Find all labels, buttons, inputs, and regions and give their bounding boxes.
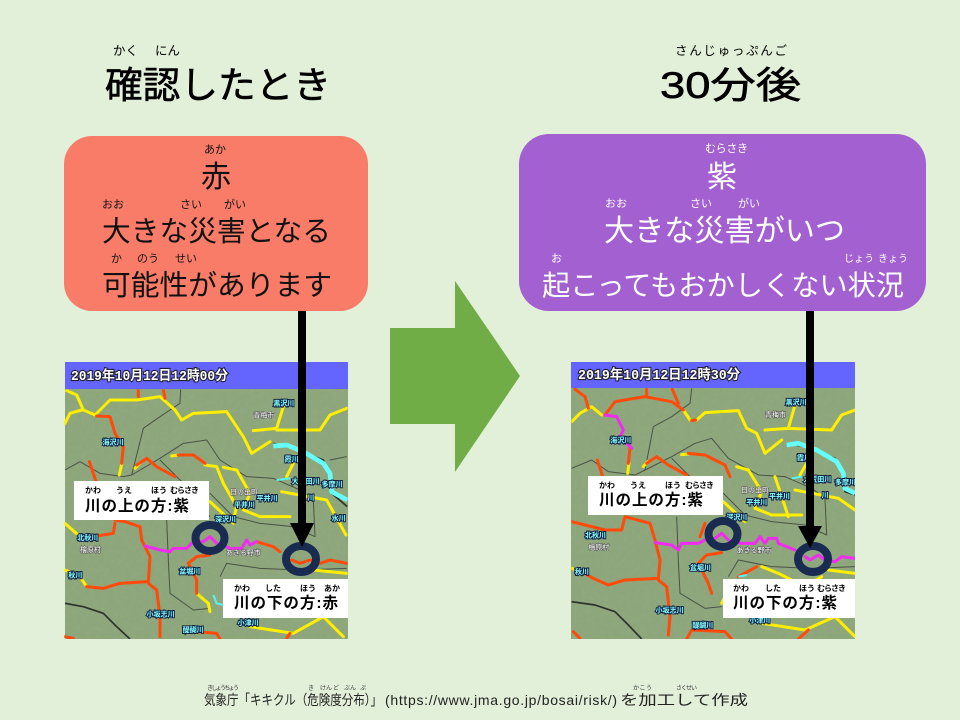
label: upstream right: うえ	[630, 480, 646, 490]
map: 12:30: 海沢川	[610, 436, 631, 445]
panel: purple warning: じょう	[844, 253, 874, 265]
label: upstream left: ほう	[151, 486, 167, 495]
map: 12:00: 日の出町	[230, 487, 258, 496]
map: 12:00: 霞川	[285, 455, 299, 463]
map: 12:30: 深沢川	[726, 512, 747, 521]
label: downstream right: した	[765, 583, 781, 593]
label: downstream right: ほう	[799, 584, 815, 593]
map: 12:30: 平井川	[746, 498, 767, 507]
source credit: き	[308, 685, 314, 692]
map: 12:00: 多摩川	[322, 480, 343, 489]
map: 12:30: 檜原村	[588, 542, 609, 551]
map: 12:30: 盆堀川	[690, 563, 711, 572]
label: downstream left: 川の下の方:赤	[234, 593, 338, 612]
label: downstream left	[223, 579, 348, 618]
label: upstream right: むらさき	[685, 481, 714, 490]
map: 12:30: 小坂志川	[656, 606, 684, 615]
map: 12:00	[65, 362, 348, 639]
panel: red warning	[64, 136, 368, 311]
map: 12:30: 醍醐川	[692, 621, 713, 630]
panel: purple warning: がい	[738, 196, 760, 210]
map: 12:00: 大荒田川	[292, 476, 320, 485]
panel: red warning: せい	[175, 252, 197, 265]
map: 12:00: 北秋川	[77, 533, 98, 542]
marker: downstream right	[798, 546, 828, 572]
label: upstream left: 川の上の方:紫	[85, 496, 189, 515]
arrow: red panel to river	[290, 311, 314, 547]
panel: red warning: がい	[224, 197, 246, 211]
map: 12:30: 青梅市	[765, 410, 786, 419]
map: 12:30: 川	[822, 491, 829, 499]
source credit: きしょうちょう	[207, 685, 239, 692]
panel: red warning: のう	[137, 252, 159, 265]
map: 12:00: 青梅市	[253, 411, 274, 420]
source credit: けん	[320, 685, 332, 692]
label: upstream right: ほう	[665, 481, 681, 490]
panel: purple warning: おお	[605, 197, 627, 210]
map: 12:00: 川	[307, 494, 314, 502]
map: 12:00: 水川	[332, 513, 346, 522]
source credit: 気象庁「キキクル（危険度分布）」	[204, 692, 382, 708]
label: upstream left	[74, 481, 209, 520]
label: upstream right: かわ	[599, 481, 615, 490]
map: 12:00: 小坂志川	[147, 610, 175, 619]
map: 12:00: 平井川	[234, 500, 255, 509]
label: upstream left: うえ	[116, 485, 132, 495]
map: 12:30	[571, 362, 856, 639]
marker: upstream left	[196, 525, 224, 551]
source credit: ぷ	[360, 685, 366, 692]
source credit: ぶん	[344, 685, 356, 692]
label: downstream left: した	[265, 583, 281, 593]
heading: left: 確認したとき	[105, 65, 331, 106]
map: 12:00: 2019年10月12日12時00分	[71, 367, 228, 385]
panel: red warning: 可能性があります	[102, 270, 332, 302]
source credit: ど	[333, 684, 339, 692]
arrow: purple panel to river	[798, 311, 822, 548]
marker: upstream right	[708, 521, 738, 547]
panel: purple warning	[519, 134, 926, 311]
map: 12:30: 大荒田川	[803, 475, 831, 484]
panel: red warning: 大きな災害となる	[102, 216, 331, 248]
map: 12:30: 2019年10月12日12時30分	[578, 366, 740, 384]
heading: left: にん	[155, 44, 180, 58]
label: downstream right: かわ	[733, 584, 749, 593]
arrow: green transition	[390, 281, 520, 472]
source credit	[204, 684, 748, 708]
map: 12:30: 霞川	[797, 454, 811, 462]
label: upstream left: むらさき	[170, 486, 199, 495]
panel: purple warning: さい	[690, 197, 712, 210]
panel: red warning: か	[111, 252, 122, 265]
map: 12:30: 黒沢川	[786, 398, 807, 407]
map: 12:30: 秋川	[575, 567, 589, 576]
map: 12:00: 海沢川	[103, 437, 124, 446]
panel: red warning: 赤	[201, 161, 231, 194]
map: 12:00: 小津川	[238, 618, 259, 627]
heading: right	[660, 43, 801, 106]
source credit: かこう	[633, 685, 652, 692]
label: upstream right	[588, 476, 723, 515]
map: 12:00: あきる野市	[226, 548, 261, 557]
map: 12:00: 盆堀川	[179, 566, 200, 575]
panel: purple warning: お	[551, 252, 562, 265]
heading: left: かく	[113, 44, 138, 58]
map: 12:00: 醍醐川	[183, 625, 204, 634]
source credit: (https://www.jma.go.jp/bosai/risk/)	[385, 692, 617, 708]
marker: downstream left	[286, 546, 316, 572]
map: 12:00: 檜原村	[80, 545, 101, 554]
map: 12:30: 平井川	[769, 491, 790, 500]
label: upstream right: 川の上の方:紫	[599, 490, 703, 509]
map: 12:00: 黒沢川	[273, 398, 294, 407]
label: downstream right	[723, 579, 855, 618]
panel: purple warning: むらさき	[705, 142, 748, 155]
panel: purple warning: 起こってもおかしくない状況	[542, 270, 904, 301]
heading: right: さんじゅっぷんご	[675, 43, 787, 58]
label: downstream right: むらさき	[817, 584, 846, 593]
map: 12:30: 多摩川	[835, 477, 856, 486]
label: upstream left: かわ	[85, 486, 101, 495]
label: downstream left: かわ	[234, 584, 250, 593]
panel: red warning: さい	[180, 198, 202, 211]
panel: purple warning: 大きな災害がいつ	[604, 215, 845, 248]
map: 12:00: 深沢川	[215, 515, 236, 524]
map: 12:30: 日の出町	[741, 485, 769, 494]
heading: right: 30分後	[660, 65, 801, 106]
label: downstream left: ほう	[300, 584, 316, 593]
panel: red warning: あか	[204, 143, 226, 156]
map: 12:30: 北秋川	[585, 530, 606, 539]
panel: purple warning: きょう	[878, 253, 908, 265]
map: 12:00: 秋川	[68, 570, 82, 579]
panel: red warning: おお	[102, 198, 124, 211]
map: 12:00: 平井川	[257, 494, 278, 503]
label: downstream left: あか	[324, 584, 340, 593]
label: downstream right: 川の下の方:紫	[733, 593, 837, 612]
source credit: さくせい	[676, 685, 697, 692]
panel: purple warning: 紫	[707, 161, 737, 194]
heading: left	[105, 44, 331, 106]
map: 12:30: 小津川	[749, 615, 770, 624]
map: 12:30: あきる野市	[737, 546, 771, 555]
source credit: を加工して作成	[620, 692, 748, 708]
